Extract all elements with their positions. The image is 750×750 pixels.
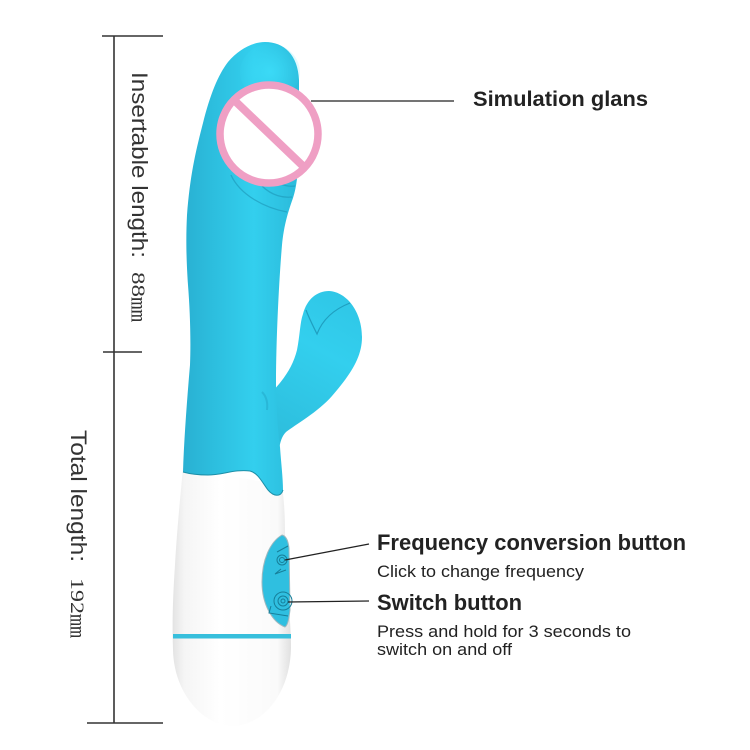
label: insertable length: 88㎜	[127, 272, 148, 323]
frequency button icon	[275, 546, 288, 574]
wave edge	[183, 471, 283, 495]
callout: censor mark	[220, 85, 318, 183]
callout: frequency conversion button: Click to change frequency	[377, 562, 585, 581]
callout: switch button	[288, 590, 631, 659]
switch button icon	[269, 592, 292, 616]
callout: frequency conversion button: Frequency conversion button	[377, 530, 686, 555]
label: insertable length	[127, 72, 152, 323]
label: total length: 192㎜	[66, 578, 87, 639]
side arm	[262, 291, 362, 450]
shaft highlight	[240, 44, 300, 100]
dimension scale	[87, 36, 163, 723]
callout: switch button: Switch button	[377, 590, 522, 615]
callout: switch button: Press and hold for 3 seconds to	[377, 622, 631, 641]
arm fold detail	[306, 303, 350, 334]
label: insertable length: Insertable length:	[127, 72, 152, 258]
label: total length: Total length:	[66, 430, 91, 562]
ridges	[231, 175, 295, 212]
callout: simulation glans: Simulation glans	[473, 88, 648, 111]
label: total length	[66, 430, 91, 639]
button panel	[262, 535, 290, 627]
handle stripe	[173, 634, 291, 638]
blue shaft	[183, 42, 299, 495]
arm junction fold	[262, 392, 267, 410]
white handle	[173, 468, 291, 726]
callout: frequency conversion button	[285, 530, 686, 581]
product illustration	[173, 42, 362, 726]
callout: switch button: switch on and off	[377, 640, 512, 659]
